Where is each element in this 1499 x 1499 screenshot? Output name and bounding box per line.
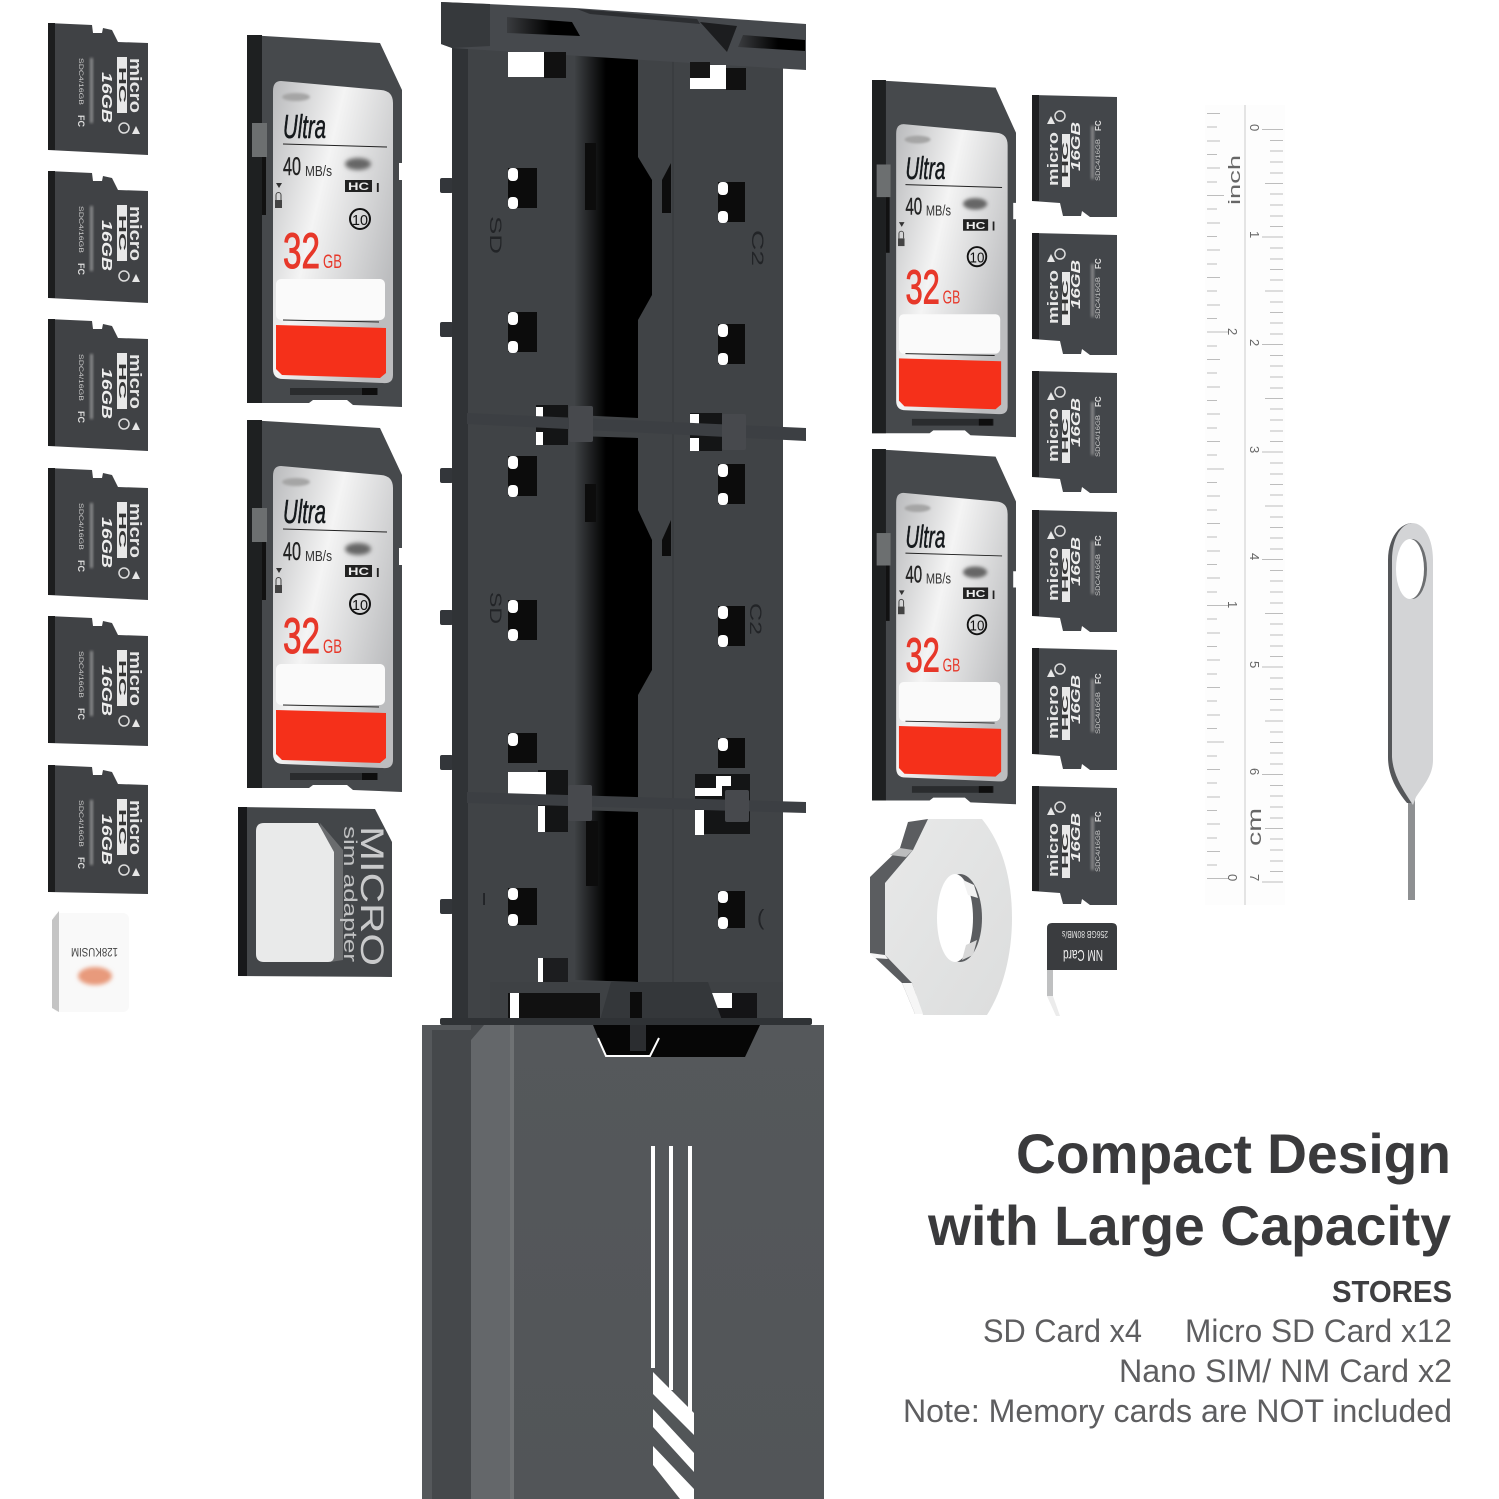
SD card 1: HC <box>348 181 369 193</box>
micro SD card 12: HC <box>1061 832 1070 869</box>
SD card 1: GB <box>323 252 342 273</box>
micro SD card 12: SDC4/16GB <box>1096 830 1102 872</box>
micro SD card 8 <box>1032 233 1117 355</box>
micro SD card 3: micro <box>126 354 145 409</box>
micro SD card 1 <box>48 23 148 155</box>
micro SD card 12 <box>1032 786 1117 905</box>
micro SD card 7: SDC4/16GB <box>1096 139 1102 181</box>
SD card 3: 32 <box>905 261 940 315</box>
SD card 1: I <box>376 180 380 195</box>
micro SD card 2: 16GB <box>98 220 115 271</box>
ruler labels: 6 <box>1247 768 1262 775</box>
micro SD card 10: 16GB <box>1068 537 1083 586</box>
SD card 3: GB <box>943 287 960 308</box>
central channel segment 1 <box>575 55 671 418</box>
NM card: NM Card <box>1063 946 1103 963</box>
micro SD card 7: FC <box>1094 120 1103 131</box>
ruler labels: 0 <box>1247 124 1262 131</box>
case: inner tray frame <box>440 2 812 1030</box>
SD card 3: I <box>992 220 995 234</box>
stripe logo <box>651 1146 694 1499</box>
micro SD card 1: FC <box>76 115 86 127</box>
micro SD card 9: FC <box>1094 396 1103 407</box>
right panel seam <box>672 58 674 983</box>
micro SD card 1: HC <box>116 67 127 103</box>
SD card 4: 32 <box>905 628 940 682</box>
divider bar 1 <box>467 405 806 451</box>
centimetre tick marks <box>1262 130 1283 882</box>
micro SD card 8: micro <box>1045 270 1062 324</box>
micro SD card 1: 16GB <box>98 72 115 123</box>
micro SD card 8: FC <box>1094 258 1103 269</box>
micro SD card 2: HC <box>116 215 127 251</box>
micro SD card 12: 16GB <box>1068 813 1083 862</box>
micro SD card 7: HC <box>1061 141 1070 178</box>
micro SD card 10: micro <box>1045 547 1062 601</box>
top slot openings <box>508 52 746 90</box>
micro SD card 10: FC <box>1094 535 1103 546</box>
title: with Large Capacity <box>927 1194 1451 1257</box>
micro SD card 3 <box>48 319 148 451</box>
micro SD card 1: SDC4/16GB <box>77 58 83 105</box>
micro SD card 9: 16GB <box>1068 398 1083 447</box>
ruler labels: 2 <box>1247 339 1262 346</box>
lower tray edge and slots <box>440 958 812 1028</box>
micro SD card 9 <box>1032 371 1117 493</box>
title <box>927 1122 1451 1257</box>
micro SD card 5: HC <box>116 660 127 696</box>
clip holes <box>508 168 745 929</box>
left column: micro SD cards <box>48 23 148 894</box>
ruler labels: inch <box>1225 155 1244 205</box>
SD card 4: I <box>992 588 995 602</box>
micro SD card 1: micro <box>126 58 145 113</box>
ruler labels: 1 <box>1247 231 1262 238</box>
micro SIM adapter: MICRO <box>354 826 390 966</box>
micro SD card 4: SDC4/16GB <box>77 503 83 550</box>
micro SD card 4: FC <box>76 560 86 572</box>
case: outer sleeve <box>422 1025 824 1499</box>
moulded slot labels <box>481 216 767 930</box>
ruler labels: 3 <box>1247 446 1262 453</box>
micro SIM adapter <box>238 807 392 977</box>
micro SD card 4: micro <box>126 503 145 558</box>
stores heading: STORES <box>1332 1274 1452 1309</box>
micro SD card 7 <box>1032 95 1117 217</box>
tray body <box>452 40 783 1030</box>
micro SD card 8: HC <box>1061 279 1070 316</box>
SD card 1: MB/s <box>305 163 332 180</box>
top bar <box>441 2 806 70</box>
micro SD card 2: SDC4/16GB <box>77 206 83 253</box>
micro SD card 11: micro <box>1045 685 1062 739</box>
NM card <box>1047 923 1117 1016</box>
ruler labels: 7 <box>1247 874 1262 881</box>
micro SIM adapter: sim adapter <box>340 826 360 962</box>
right column: micro SD cards <box>1032 95 1117 905</box>
micro SD card 11: 16GB <box>1068 675 1083 724</box>
central channel segment 3 <box>575 810 638 982</box>
moulded slot labels: ( <box>757 905 765 930</box>
micro SD card 2: FC <box>76 263 86 275</box>
micro SD card 10: SDC4/16GB <box>1096 554 1102 596</box>
ruler labels: 5 <box>1247 661 1262 668</box>
moulded slot labels: ı <box>481 885 487 910</box>
micro SD card 12: FC <box>1094 811 1103 822</box>
ruler <box>1205 105 1285 905</box>
micro SD card 6: FC <box>76 857 86 869</box>
moulded slot labels: C2 <box>748 230 767 266</box>
sleeve left bevels <box>422 1025 514 1499</box>
micro SD card 3: SDC4/16GB <box>77 354 83 401</box>
micro SD card 4 <box>48 468 148 600</box>
SD card 3: 10 <box>970 250 985 266</box>
SD card 3: HC <box>966 221 986 232</box>
ruler labels <box>1225 124 1266 881</box>
micro SD card 11: HC <box>1061 694 1070 731</box>
micro SD card 4: HC <box>116 512 127 548</box>
SD card 4 <box>872 449 1016 804</box>
stores list: Note: Memory cards are NOT included <box>903 1393 1452 1429</box>
title: Compact Design <box>1016 1122 1451 1185</box>
SD card 3: 40 <box>905 194 922 220</box>
SD card 2: 40 <box>283 538 301 566</box>
stores list <box>903 1313 1452 1429</box>
micro SD card 7: micro <box>1045 132 1062 186</box>
icon: card opener washer <box>870 819 1012 1015</box>
SD card 3: MB/s <box>926 203 951 219</box>
micro SD card 9: SDC4/16GB <box>1096 415 1102 457</box>
micro SD card 5: micro <box>126 651 145 706</box>
headline and copy <box>903 1122 1452 1429</box>
stores list: Nano SIM/ NM Card x2 <box>1119 1353 1452 1389</box>
micro SD card 5: 16GB <box>98 665 115 716</box>
SD card 1: 10 <box>352 212 368 229</box>
micro SD card 8: 16GB <box>1068 260 1083 309</box>
SD card 2: I <box>376 565 380 580</box>
right column: SD cards <box>872 80 1016 804</box>
SD card 4: 40 <box>905 561 922 588</box>
micro SD card 5: SDC4/16GB <box>77 651 83 698</box>
SD card 2: 32 <box>283 608 320 664</box>
stores list: Micro SD Card x12 <box>1185 1313 1452 1349</box>
ruler labels: 1 <box>1225 601 1240 608</box>
micro SD card 4: 16GB <box>98 517 115 568</box>
divider bar 2 <box>467 770 806 835</box>
SD card 3 <box>872 80 1016 437</box>
SD card 2: GB <box>323 637 342 658</box>
micro SD card 6: 16GB <box>98 814 115 865</box>
micro SD card 6: HC <box>116 809 127 845</box>
SD card 4: MB/s <box>926 570 951 587</box>
nano SIM card: 128KUSIM <box>71 945 118 959</box>
ruler labels: cm <box>1245 808 1266 846</box>
micro SD card 3: HC <box>116 363 127 399</box>
SD card 4: 10 <box>970 617 985 633</box>
micro SD card 2 <box>48 171 148 303</box>
micro SD card 9: HC <box>1061 417 1070 454</box>
SD card 2 <box>247 420 402 792</box>
SD card 4: GB <box>943 655 960 676</box>
icon: SIM eject pin <box>1388 523 1433 900</box>
SD card 1: 32 <box>283 223 320 279</box>
stores list: SD Card x4 <box>983 1313 1142 1349</box>
moulded slot labels: SD <box>486 592 505 624</box>
nano SIM card <box>52 911 129 1012</box>
left dark side strip <box>452 48 468 1018</box>
micro SD card 9: micro <box>1045 408 1062 462</box>
ruler labels: 0 <box>1225 874 1240 881</box>
SD card 4: Ultra <box>905 519 945 554</box>
SD card 1: Ultra <box>283 108 326 145</box>
micro SD card 6: SDC4/16GB <box>77 800 83 847</box>
micro SD card 6: micro <box>126 800 145 855</box>
left side tabs <box>440 178 453 914</box>
micro SD card 7: 16GB <box>1068 122 1083 171</box>
ruler labels: 2 <box>1225 328 1240 335</box>
SD card 3: Ultra <box>905 150 945 186</box>
micro SD card 10 <box>1032 510 1117 632</box>
micro SD card 11 <box>1032 648 1117 770</box>
micro SD card 11: SDC4/16GB <box>1096 692 1102 734</box>
SD card 2: HC <box>348 566 369 578</box>
moulded slot labels: C2 <box>746 603 765 635</box>
central channel segment 2 <box>575 436 671 800</box>
sleeve thumb notch <box>593 1025 760 1057</box>
SD card 2: 10 <box>352 597 368 614</box>
moulded slot labels: SD <box>486 216 505 254</box>
NM card: 256GB 80MB/s <box>1062 928 1108 939</box>
micro SD card 10: HC <box>1061 556 1070 593</box>
micro SD card 3: 16GB <box>98 368 115 419</box>
micro SD card 3: FC <box>76 411 86 423</box>
SD card 2: Ultra <box>283 493 326 530</box>
ruler labels: 4 <box>1247 553 1262 560</box>
micro SD card 5: FC <box>76 708 86 720</box>
SD card 1: 40 <box>283 153 301 181</box>
SD card 2: MB/s <box>305 548 332 565</box>
SD card 1 <box>247 35 402 407</box>
micro SD card 5 <box>48 616 148 746</box>
micro SD card 2: micro <box>126 206 145 261</box>
micro SD card 11: FC <box>1094 673 1103 684</box>
micro SD card 12: micro <box>1045 823 1062 877</box>
micro SD card 8: SDC4/16GB <box>1096 277 1102 319</box>
inch tick marks <box>1207 114 1229 878</box>
left column: SD cards <box>247 35 402 792</box>
SD card 4: HC <box>966 589 986 600</box>
micro SD card 6 <box>48 765 148 894</box>
